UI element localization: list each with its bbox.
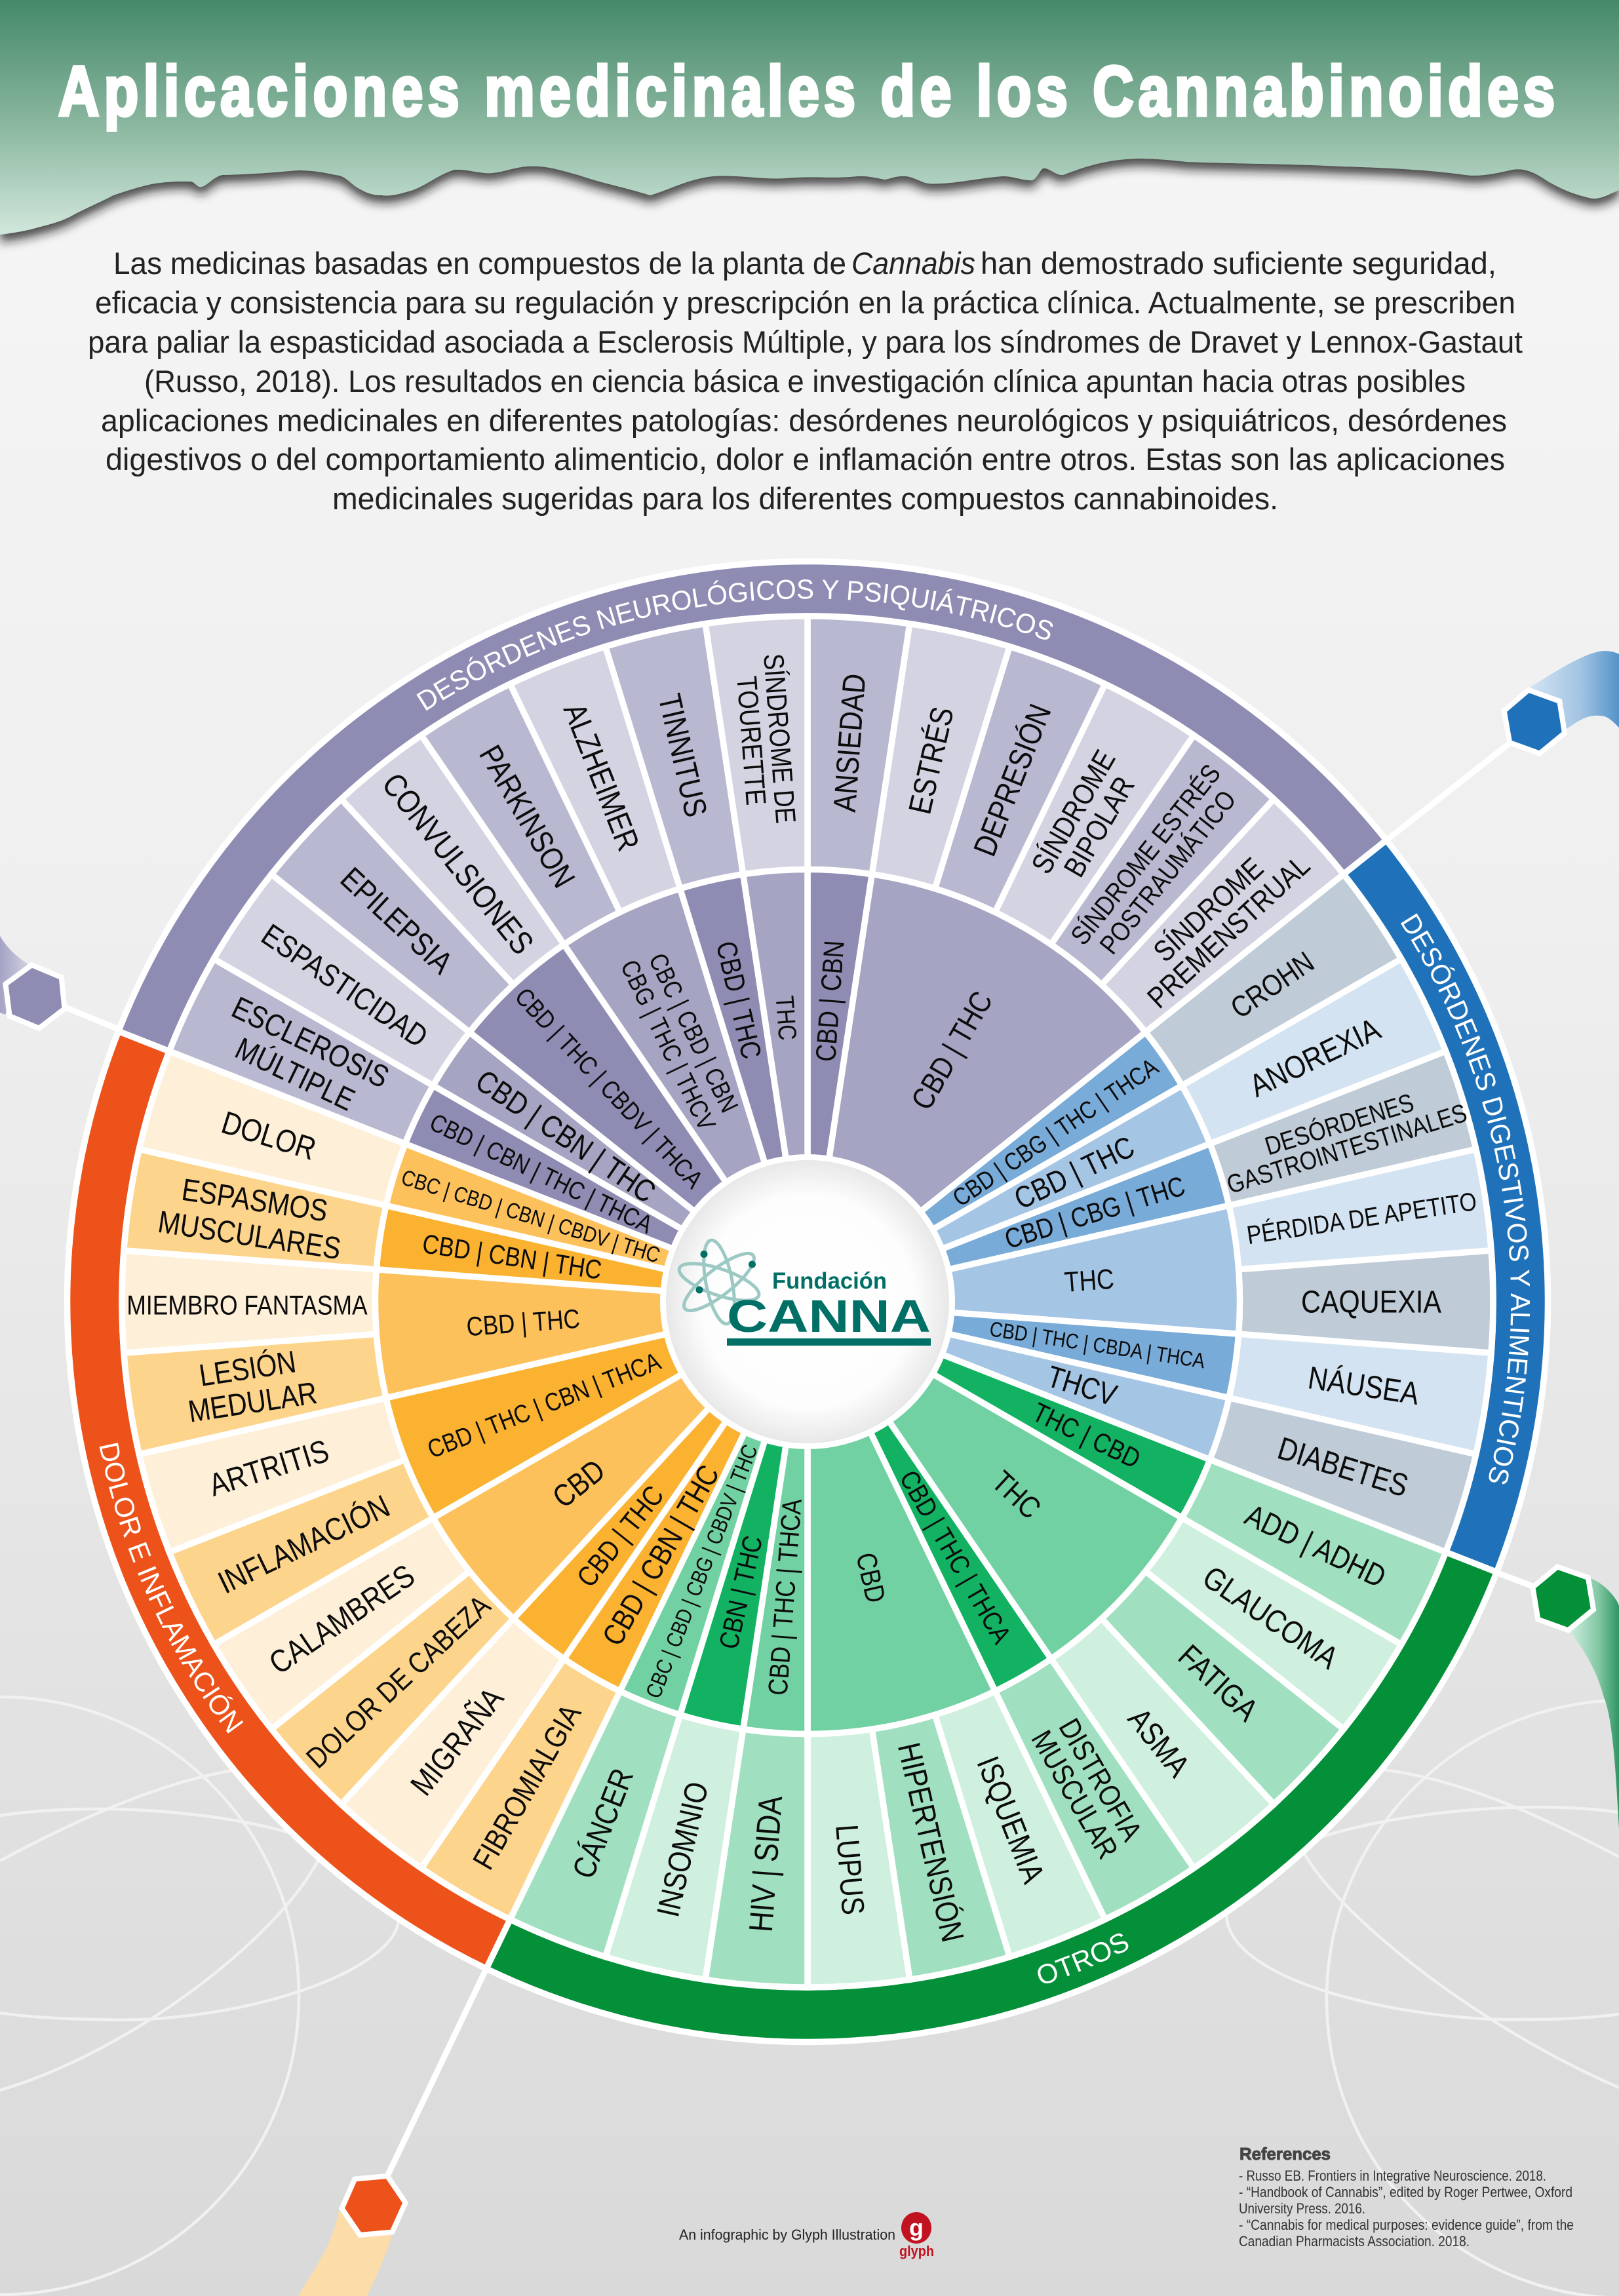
condition: FIBROMIALGIA xyxy=(418,1643,622,1919)
references: - “Handbook of Cannabis”, edited by Roger Pertwee, Oxford xyxy=(1239,2184,1572,2200)
condition: HIPERTENSIÓN xyxy=(836,1710,1009,1987)
icon: atom xyxy=(675,1237,763,1327)
compound: CBD: CBD xyxy=(546,1453,612,1515)
condition: ESCLEROSIS MÚLTIPLE: MÚLTIPLE xyxy=(230,1031,360,1118)
condition: ASMA: ASMA xyxy=(1121,1701,1198,1784)
condition: ALZHEIMER: ALZHEIMER xyxy=(556,698,647,856)
wheel xyxy=(68,562,1548,2042)
compound: CBD xyxy=(638,1302,995,1772)
condition: CROHN xyxy=(1142,874,1407,1115)
references: University Press. 2016. xyxy=(1239,2200,1365,2217)
compound: THC xyxy=(714,1302,1182,1681)
title: Aplicaciones medicinales de los Cannabinoides xyxy=(58,51,1555,130)
compound: CBD | CBN | THC: CBD | CBN | THC xyxy=(420,1229,604,1285)
condition: DEPRESIÓN xyxy=(933,646,1107,924)
centre disc xyxy=(660,1154,955,1449)
compound: CBD | THC xyxy=(680,870,869,1302)
logo: Fundación CANNA xyxy=(675,1237,931,1346)
compound: CBC | CBD | CBN and CBG | THC | THCV: CBG | THC | THCV xyxy=(615,955,722,1135)
intro paragraph: Las medicinas basadas en compuestos de la planta de xyxy=(113,246,846,281)
condition: FATIGA: FATIGA xyxy=(1171,1637,1266,1728)
credit line: An infographic by Glyph Illustration xyxy=(679,2227,895,2243)
compound: CBD | THC: CBD | THC xyxy=(465,1304,581,1342)
condition: SÍNDROME BIPOLAR: SÍNDROME xyxy=(1024,745,1122,879)
compound: CBD | THC | CBDV | THCA: CBD | THC | CBDV | THCA xyxy=(509,982,709,1194)
compound: CBD | THC | THCA: CBD | THC | THCA xyxy=(763,1498,808,1696)
compound: CBD | THC: CBD | THC xyxy=(710,938,768,1062)
condition: ANSIEDAD: ANSIEDAD xyxy=(827,672,872,813)
condition: DOLOR xyxy=(139,1049,414,1207)
compound: CBD | THC | CBN | THCA: CBD | THC | CBN | THCA xyxy=(423,1346,665,1464)
compound: THC: THC xyxy=(1063,1263,1115,1298)
condition: SÍNDROME ESTRÉS POSTRAUMÁTICO xyxy=(1048,735,1278,1006)
condition: DISTROFIA MUSCULAR: MUSCULAR xyxy=(1025,1724,1125,1864)
condition: ISQUEMIA xyxy=(901,1687,1105,1964)
condition: ANSIEDAD xyxy=(808,616,910,874)
condition: LESIÓN MEDULAR: LESIÓN xyxy=(197,1344,298,1393)
condition: ADD | ADHD: ADD | ADHD xyxy=(1239,1498,1391,1595)
ribbon: green xyxy=(1571,1578,1619,1829)
compound: CBD | THC | CBN | THCA xyxy=(370,1192,808,1518)
condition: ESPASMOS MUSCULARES xyxy=(124,1148,389,1270)
compound: THC | CBD xyxy=(784,1302,1210,1519)
condition: PARKINSON: PARKINSON xyxy=(473,739,582,893)
ribbon: blue xyxy=(1531,651,1619,729)
condition: ESCLEROSIS MÚLTIPLE xyxy=(169,956,447,1146)
outer ring: blue band xyxy=(1344,840,1548,1572)
condition: EPILEPSIA xyxy=(271,794,537,1035)
intro paragraph: medicinales sugeridas para los diferentes compuestos cannabinoides. xyxy=(332,481,1278,516)
condition: LUPUS: LUPUS xyxy=(829,1823,871,1916)
compound: CBD | CBN | THC | THCA: CBD | CBN | THC | THCA xyxy=(425,1108,657,1239)
ribbon: orange xyxy=(298,2211,392,2296)
condition: LESIÓN MEDULAR: MEDULAR xyxy=(186,1376,319,1430)
compound: CBD: CBD xyxy=(850,1550,891,1606)
condition: PARKINSON xyxy=(421,678,651,948)
compound: CBD | CBN | THC: CBD | CBN | THC xyxy=(469,1063,661,1210)
compound: CBC | CBD | CBG | CBDV | THC xyxy=(619,1283,808,1715)
glyph logo: glyph xyxy=(899,2243,934,2259)
condition: SÍNDROME DE TOURETTE xyxy=(705,608,845,879)
condition: NÁUSEA xyxy=(1226,1334,1491,1455)
condition: DEPRESIÓN: DEPRESIÓN xyxy=(966,699,1058,861)
connector: green xyxy=(1496,1572,1532,1586)
outer ring: green band xyxy=(486,1552,1496,2042)
outer ring: purple band xyxy=(119,562,1386,1051)
compound: CBD | THC xyxy=(358,1177,808,1398)
glyph logo xyxy=(899,2212,934,2259)
condition: ESPASTICIDAD xyxy=(214,870,488,1088)
compound: CBD | CBN | THC | THCA xyxy=(405,1084,831,1302)
outer ring: orange band xyxy=(68,1031,510,1969)
condition: SÍNDROME ESTRÉS POSTRAUMÁTICO: SÍNDROME ESTRÉS xyxy=(1065,759,1227,951)
references xyxy=(1239,2144,1574,2249)
condition: SÍNDROME PREMENSTRUAL: SÍNDROME xyxy=(1147,851,1270,968)
condition: MIGRAÑA: MIGRAÑA xyxy=(403,1681,511,1802)
compound: CBD | THC xyxy=(808,1085,1214,1357)
condition: CÁNCER xyxy=(508,1680,682,1957)
compound: CBD | CBG | THC xyxy=(808,1144,1234,1362)
condition: ISQUEMIA: ISQUEMIA xyxy=(970,1751,1052,1888)
logo: Fundación CANNA: CANNA xyxy=(727,1291,931,1342)
connector: blue xyxy=(1386,743,1510,840)
condition: SÍNDROME BIPOLAR: BIPOLAR xyxy=(1057,771,1141,882)
condition: PÉRDIDA DE APETITO: PÉRDIDA DE APETITO xyxy=(1245,1186,1479,1250)
condition: HIPERTENSIÓN: HIPERTENSIÓN xyxy=(891,1740,971,1945)
compound: CBD | CBG | THC | THCA xyxy=(808,1032,1186,1352)
condition: ESPASMOS MUSCULARES: MUSCULARES xyxy=(156,1205,343,1266)
references: Canadian Pharmacists Association. 2018. xyxy=(1239,2233,1470,2249)
condition: ADD | ADHD xyxy=(1168,1458,1446,1647)
intro paragraph: Cannabis xyxy=(851,246,975,281)
compound: THC: THC xyxy=(770,995,802,1041)
compound: CBN | THC xyxy=(680,1292,808,1729)
condition: SÍNDROME ESTRÉS POSTRAUMÁTICO: POSTRAUMÁTICO xyxy=(1094,785,1242,960)
compound: CBD | CBN: CBD | CBN xyxy=(810,939,850,1062)
condition: SÍNDROME DE TOURETTE: SÍNDROME DE xyxy=(757,653,802,825)
compound: CBC | CBD | CBN and CBG | THC | THCV: CBC | CBD | CBN xyxy=(643,948,744,1117)
condition: ESPASMOS MUSCULARES: ESPASMOS xyxy=(180,1173,330,1228)
condition: DIABETES xyxy=(1201,1397,1476,1554)
compound: CBC | CBD | CBN | CBDV | THC xyxy=(386,1142,822,1302)
condition: ESCLEROSIS MÚLTIPLE: ESCLEROSIS xyxy=(226,990,394,1095)
compound: CBD | THC xyxy=(808,874,1163,1346)
condition: PÉRDIDA DE APETITO xyxy=(1224,1149,1498,1306)
compound: CBD | THC | CBDA | THCA: CBD | THC | CBDA | THCA xyxy=(988,1317,1207,1373)
ring label: others: OTROS xyxy=(1038,1934,1129,1983)
intro paragraph: aplicaciones medicinales en diferentes patologías: desórdenes neurológicos y psiquiátricos, desórdenes xyxy=(101,403,1507,438)
intro paragraph xyxy=(88,246,1523,516)
condition: LUPUS xyxy=(770,1724,910,1995)
compound: CBD | CBN | THC xyxy=(376,1205,812,1302)
condition: TINNITUS xyxy=(606,617,779,893)
compound: CBD | THC: CBD | THC xyxy=(905,986,1000,1116)
condition: SÍNDROME BIPOLAR xyxy=(993,684,1197,961)
logo: Fundación CANNA: Fundación xyxy=(772,1268,887,1294)
condition: ASMA xyxy=(1023,1615,1274,1874)
condition: ARTRITIS: ARTRITIS xyxy=(205,1433,333,1503)
condition: ANOREXIA: ANOREXIA xyxy=(1244,1011,1386,1104)
connector: purple xyxy=(66,1007,118,1029)
condition: CONVULSIONES xyxy=(341,730,592,988)
connector: orange xyxy=(387,1964,488,2177)
condition: FIBROMIALGIA: FIBROMIALGIA xyxy=(467,1699,588,1875)
condition: DOLOR: DOLOR xyxy=(218,1104,321,1167)
condition: GLAUCOMA: GLAUCOMA xyxy=(1196,1559,1345,1676)
condition: MIEMBRO FANTASMA: MIEMBRO FANTASMA xyxy=(127,1291,368,1321)
compound: THC xyxy=(808,1205,1257,1426)
condition: FATIGA xyxy=(1078,1568,1344,1809)
compound: CBD | THC | CBDV | THCA xyxy=(469,933,887,1302)
condition: MIGRAÑA xyxy=(337,1597,567,1868)
hexagon: orange xyxy=(345,2179,402,2232)
condition: HIV | SIDA xyxy=(705,1729,808,1987)
condition: EPILEPSIA: EPILEPSIA xyxy=(334,860,460,981)
glyph logo: g xyxy=(909,2214,924,2241)
condition: SÍNDROME DE TOURETTE: TOURETTE xyxy=(731,675,772,806)
references: References xyxy=(1239,2144,1331,2164)
condition: DISTROFIA MUSCULAR: DISTROFIA xyxy=(1053,1713,1149,1847)
condition: ALZHEIMER xyxy=(510,640,714,916)
condition: INSOMNIO: INSOMNIO xyxy=(650,1778,715,1920)
compound: CBN | THC: CBN | THC xyxy=(714,1533,769,1652)
condition: SÍNDROME PREMENSTRUAL xyxy=(1099,799,1349,1058)
compound: THC: THC xyxy=(985,1465,1047,1526)
condition: CALAMBRES xyxy=(208,1489,473,1729)
condition: ESTRÉS: ESTRÉS xyxy=(901,703,961,817)
compound: CBD | CBN | THC: CBD | CBN | THC xyxy=(596,1460,726,1652)
ring label: neurological: DESÓRDENES NEUROLÓGICOS Y PSIQUIÁTRICOS xyxy=(416,579,1053,710)
condition: DESÓRDENES GASTROINTESTINALES xyxy=(1205,1051,1483,1241)
condition: DIABETES: DIABETES xyxy=(1274,1430,1413,1504)
compound: THC xyxy=(743,865,871,1302)
ring label: digestive: DESÓRDENES DIGESTIVOS Y ALIMENTICIOS xyxy=(1401,914,1530,1484)
condition: DESÓRDENES GASTROINTESTINALES: GASTROINTESTINALES xyxy=(1223,1098,1470,1199)
condition: CÁNCER: CÁNCER xyxy=(565,1764,640,1883)
decorative circles lower left xyxy=(0,1697,399,2295)
hexagon: green xyxy=(1536,1570,1591,1627)
hexagon: blue xyxy=(1507,693,1562,750)
intro paragraph: para paliar la espasticidad asociada a Esclerosis Múltiple, y para los síndromes de Dravet y Lennox-Gastaut xyxy=(88,324,1523,359)
condition: HIV | SIDA: HIV | SIDA xyxy=(741,1794,789,1934)
intro paragraph: (Russo, 2018). Los resultados en ciencia básica e investigación clínica apuntan hacia otras posibles xyxy=(144,364,1466,399)
condition: ESPASTICIDAD: ESPASTICIDAD xyxy=(255,918,434,1055)
condition: CAQUEXIA: CAQUEXIA xyxy=(1301,1284,1442,1319)
references: - “Cannabis for medical purposes: evidence guide”, from the xyxy=(1239,2217,1574,2233)
condition: SÍNDROME PREMENSTRUAL: PREMENSTRUAL xyxy=(1141,848,1316,1015)
compound: CBD xyxy=(420,1215,808,1618)
hexagon: purple xyxy=(9,968,62,1025)
compound: CBC | CBD | CBN | CBDV | THC: CBC | CBD | CBN | CBDV | THC xyxy=(399,1165,663,1268)
references: - Russo EB. Frontiers in Integrative Neuroscience. 2018. xyxy=(1239,2168,1546,2184)
compound: CBD | THC | THCA xyxy=(743,1302,808,1734)
compound: CBD | CBG | THC | THCA: CBD | CBG | THC | THCA xyxy=(948,1053,1163,1212)
condition: DESÓRDENES GASTROINTESTINALES: DESÓRDENES xyxy=(1261,1088,1417,1161)
condition: CONVULSIONES: CONVULSIONES xyxy=(375,766,541,961)
condition: ARTRITIS xyxy=(132,1363,410,1552)
intro paragraph: eficacia y consistencia para su regulación y prescripción en la práctica clínica. Actualmente, se prescriben xyxy=(95,285,1515,320)
condition: CROHN: CROHN xyxy=(1224,945,1320,1024)
ribbon: purple xyxy=(0,936,28,1015)
ring label: pain: DOLOR E INFLAMACIÓN xyxy=(100,1443,244,1734)
compound: THCV xyxy=(793,1302,1229,1461)
compound: CBD | CBN | THC xyxy=(562,1274,808,1691)
condition: ANOREXIA xyxy=(1178,959,1453,1177)
condition: MIEMBRO FANTASMA xyxy=(116,1232,381,1353)
intro paragraph: digestivos o del comportamiento alimenticio, dolor e inflamación entre otros. Estas son las aplicaciones xyxy=(106,442,1505,477)
compound: CBD | THC: CBD | THC xyxy=(571,1480,670,1593)
compound: CBD | CBN xyxy=(808,869,872,1302)
compound: CBD | THC xyxy=(511,1266,808,1659)
condition: INFLAMACIÓN: INFLAMACIÓN xyxy=(212,1488,395,1601)
condition: DOLOR DE CABEZA: DOLOR DE CABEZA xyxy=(300,1588,497,1774)
compound: THC | CBD: THC | CBD xyxy=(1028,1397,1145,1475)
condition: NÁUSEA: NÁUSEA xyxy=(1306,1359,1422,1412)
condition: INSOMNIO xyxy=(604,1709,744,1979)
condition: LESIÓN MEDULAR xyxy=(117,1297,391,1454)
compound: CBD | THC | THCA: CBD | THC | THCA xyxy=(893,1466,1017,1649)
condition: TINNITUS: TINNITUS xyxy=(652,690,714,821)
compound: CBD | THC: CBD | THC xyxy=(1009,1130,1140,1216)
condition: CALAMBRES: CALAMBRES xyxy=(263,1557,421,1681)
compound: CBC | CBD | CBN and CBG | THC | THCV xyxy=(564,873,913,1302)
condition: ESTRÉS xyxy=(871,624,1011,894)
decorative circles lower right xyxy=(1226,1700,1619,2296)
compound: CBD | THC | CBDA | THCA xyxy=(803,1302,1239,1398)
header banner xyxy=(0,0,1619,235)
compound: THCV: THCV xyxy=(1043,1360,1121,1413)
condition: DISTROFIA MUSCULAR xyxy=(964,1655,1194,1926)
condition: GLAUCOMA xyxy=(1127,1515,1401,1733)
compound: CBD | CBG | THC: CBD | CBG | THC xyxy=(1002,1171,1189,1255)
compound: CBD | CBN | THC xyxy=(433,1030,840,1302)
condition: CAQUEXIA xyxy=(1234,1251,1499,1372)
condition: INFLAMACIÓN xyxy=(163,1427,437,1644)
condition: DOLOR DE CABEZA xyxy=(266,1546,517,1804)
compound: CBC | CBD | CBG | CBDV | THC: CBC | CBD | CBG | CBDV | THC xyxy=(641,1441,762,1702)
compound: CBD | THC | THCA xyxy=(754,1302,1051,1695)
intro paragraph: han demostrado suficiente seguridad, xyxy=(981,246,1496,281)
